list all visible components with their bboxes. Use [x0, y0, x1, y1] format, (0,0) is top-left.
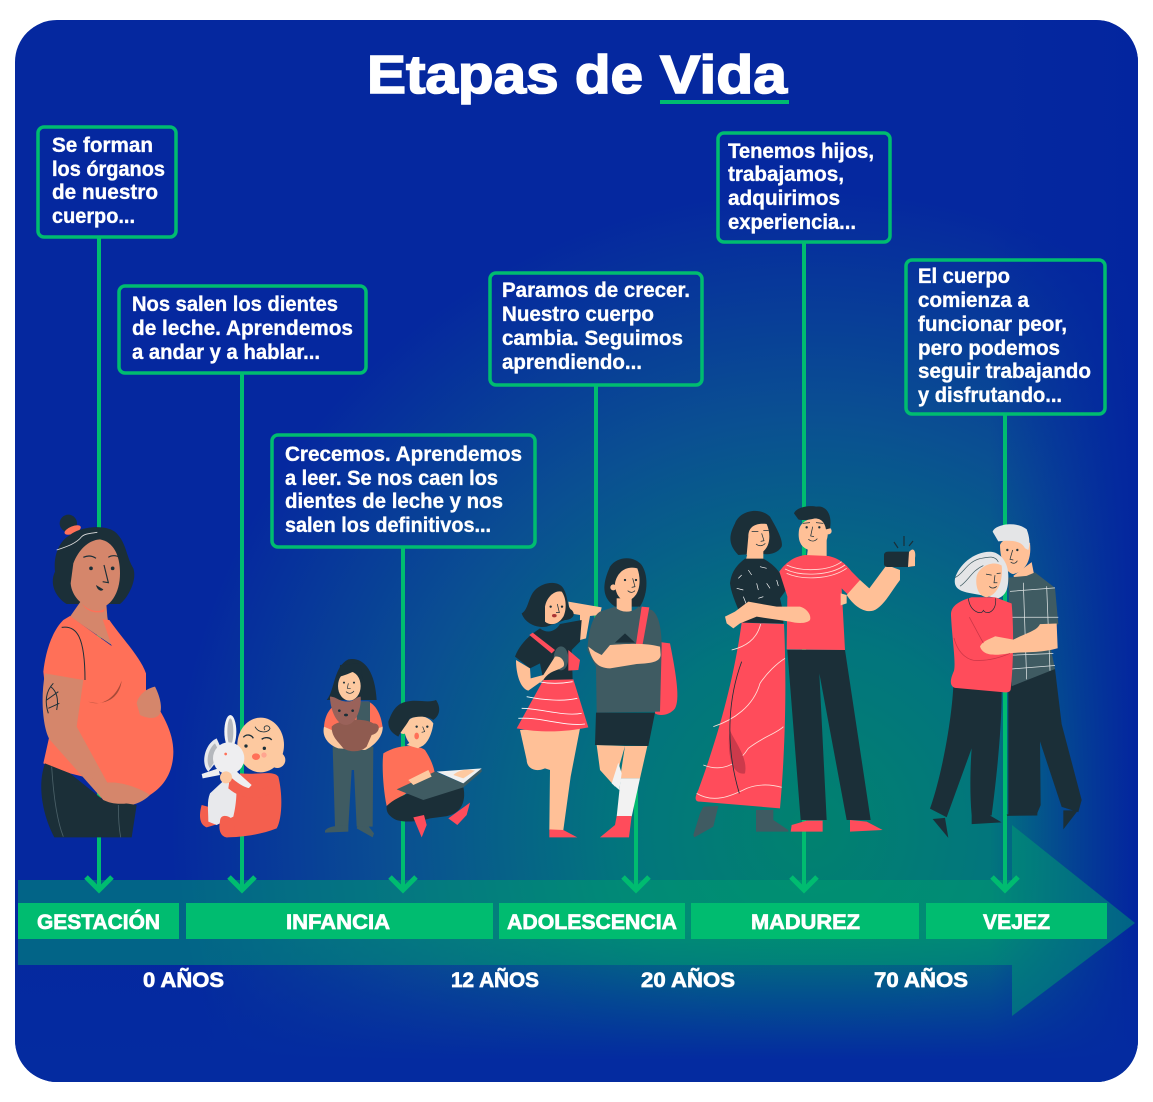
callout: infancia: a andar y a hablar...	[132, 341, 320, 364]
callout: niñez: Crecemos. Aprendemos	[285, 443, 522, 466]
callout: gestación: los órganos	[52, 158, 165, 181]
callout: gestación: Se forman	[52, 134, 153, 157]
callout: gestación	[38, 127, 176, 237]
callout: niñez: dientes de leche y nos	[285, 490, 503, 513]
callout: adolescencia: Nuestro cuerpo	[502, 303, 654, 326]
callout: vejez	[906, 260, 1105, 414]
age label: 70 años: 70 AÑOS	[874, 967, 968, 992]
figure: baby with bunny	[200, 715, 285, 837]
stage bar: gestación: GESTACIÓN	[37, 909, 160, 934]
stage bar: infancia	[186, 903, 493, 939]
figure: teen girl	[515, 583, 602, 837]
callout: vejez: pero podemos	[918, 337, 1060, 360]
callout: gestación: cuerpo...	[52, 205, 135, 228]
callout: vejez: y disfrutando...	[918, 384, 1062, 407]
callout: niñez	[272, 435, 535, 547]
callout: niñez: a leer. Se nos caen los	[285, 467, 498, 490]
connector arrow: infancia	[229, 373, 255, 890]
age label: 0 años: 0 AÑOS	[143, 967, 224, 992]
callout: infancia: de leche. Aprendemos	[132, 317, 353, 340]
age label: 20 años: 20 AÑOS	[641, 967, 735, 992]
figure: elderly couple	[930, 524, 1082, 838]
figure: woman in red skirt	[693, 511, 788, 837]
age label: 12 años: 12 AÑOS	[451, 967, 539, 992]
stage bar: vejez: VEJEZ	[983, 910, 1050, 934]
callout: gestación: de nuestro	[52, 181, 158, 204]
callout: madurez: experiencia...	[728, 211, 856, 234]
figure: girl with dog	[324, 659, 383, 837]
callout: vejez: seguir trabajando	[918, 360, 1091, 383]
timeline arrow	[18, 825, 1135, 1016]
callout: vejez: El cuerpo	[918, 265, 1010, 288]
figure: teen with backpack	[587, 558, 677, 837]
figure: boy reading	[383, 700, 482, 837]
callout: adolescencia: aprendiendo...	[502, 351, 642, 374]
icon: phone	[884, 536, 915, 567]
callout: adolescencia: cambia. Seguimos	[502, 327, 683, 350]
callout: vejez: funcionar peor,	[918, 313, 1067, 336]
title	[367, 45, 789, 105]
callout: infancia: Nos salen los dientes	[132, 293, 338, 316]
connector arrow: niñez	[390, 547, 416, 890]
figure: man taking selfie	[725, 506, 910, 832]
connector arrow: vejez	[992, 414, 1018, 890]
callout: madurez: Tenemos hijos,	[728, 140, 874, 163]
connector arrow: adolescencia	[596, 385, 649, 890]
callout: infancia	[119, 286, 366, 373]
callout: madurez: adquirimos	[728, 187, 840, 210]
title: Vida	[660, 45, 788, 105]
callout: niñez: salen los definitivos...	[285, 514, 491, 537]
connector arrow: gestación	[86, 237, 112, 890]
stage bar: madurez	[691, 903, 919, 939]
stage bar: adolescencia: ADOLESCENCIA	[507, 910, 677, 934]
stage bar: infancia: INFANCIA	[286, 910, 390, 934]
connector arrow: madurez	[791, 242, 817, 890]
figure: pregnant woman	[41, 515, 173, 837]
callout: adolescencia	[490, 273, 702, 385]
stage bar: gestación	[18, 903, 179, 939]
callout: adolescencia: Paramos de crecer.	[502, 279, 690, 302]
callout: madurez	[718, 133, 890, 242]
callout: vejez: comienza a	[918, 289, 1029, 312]
stage bar: madurez: MADUREZ	[751, 910, 860, 934]
title: Etapas de	[367, 45, 643, 105]
stage bar: vejez	[926, 903, 1107, 939]
stage bar: adolescencia	[499, 903, 685, 939]
callout: madurez: trabajamos,	[728, 163, 844, 186]
